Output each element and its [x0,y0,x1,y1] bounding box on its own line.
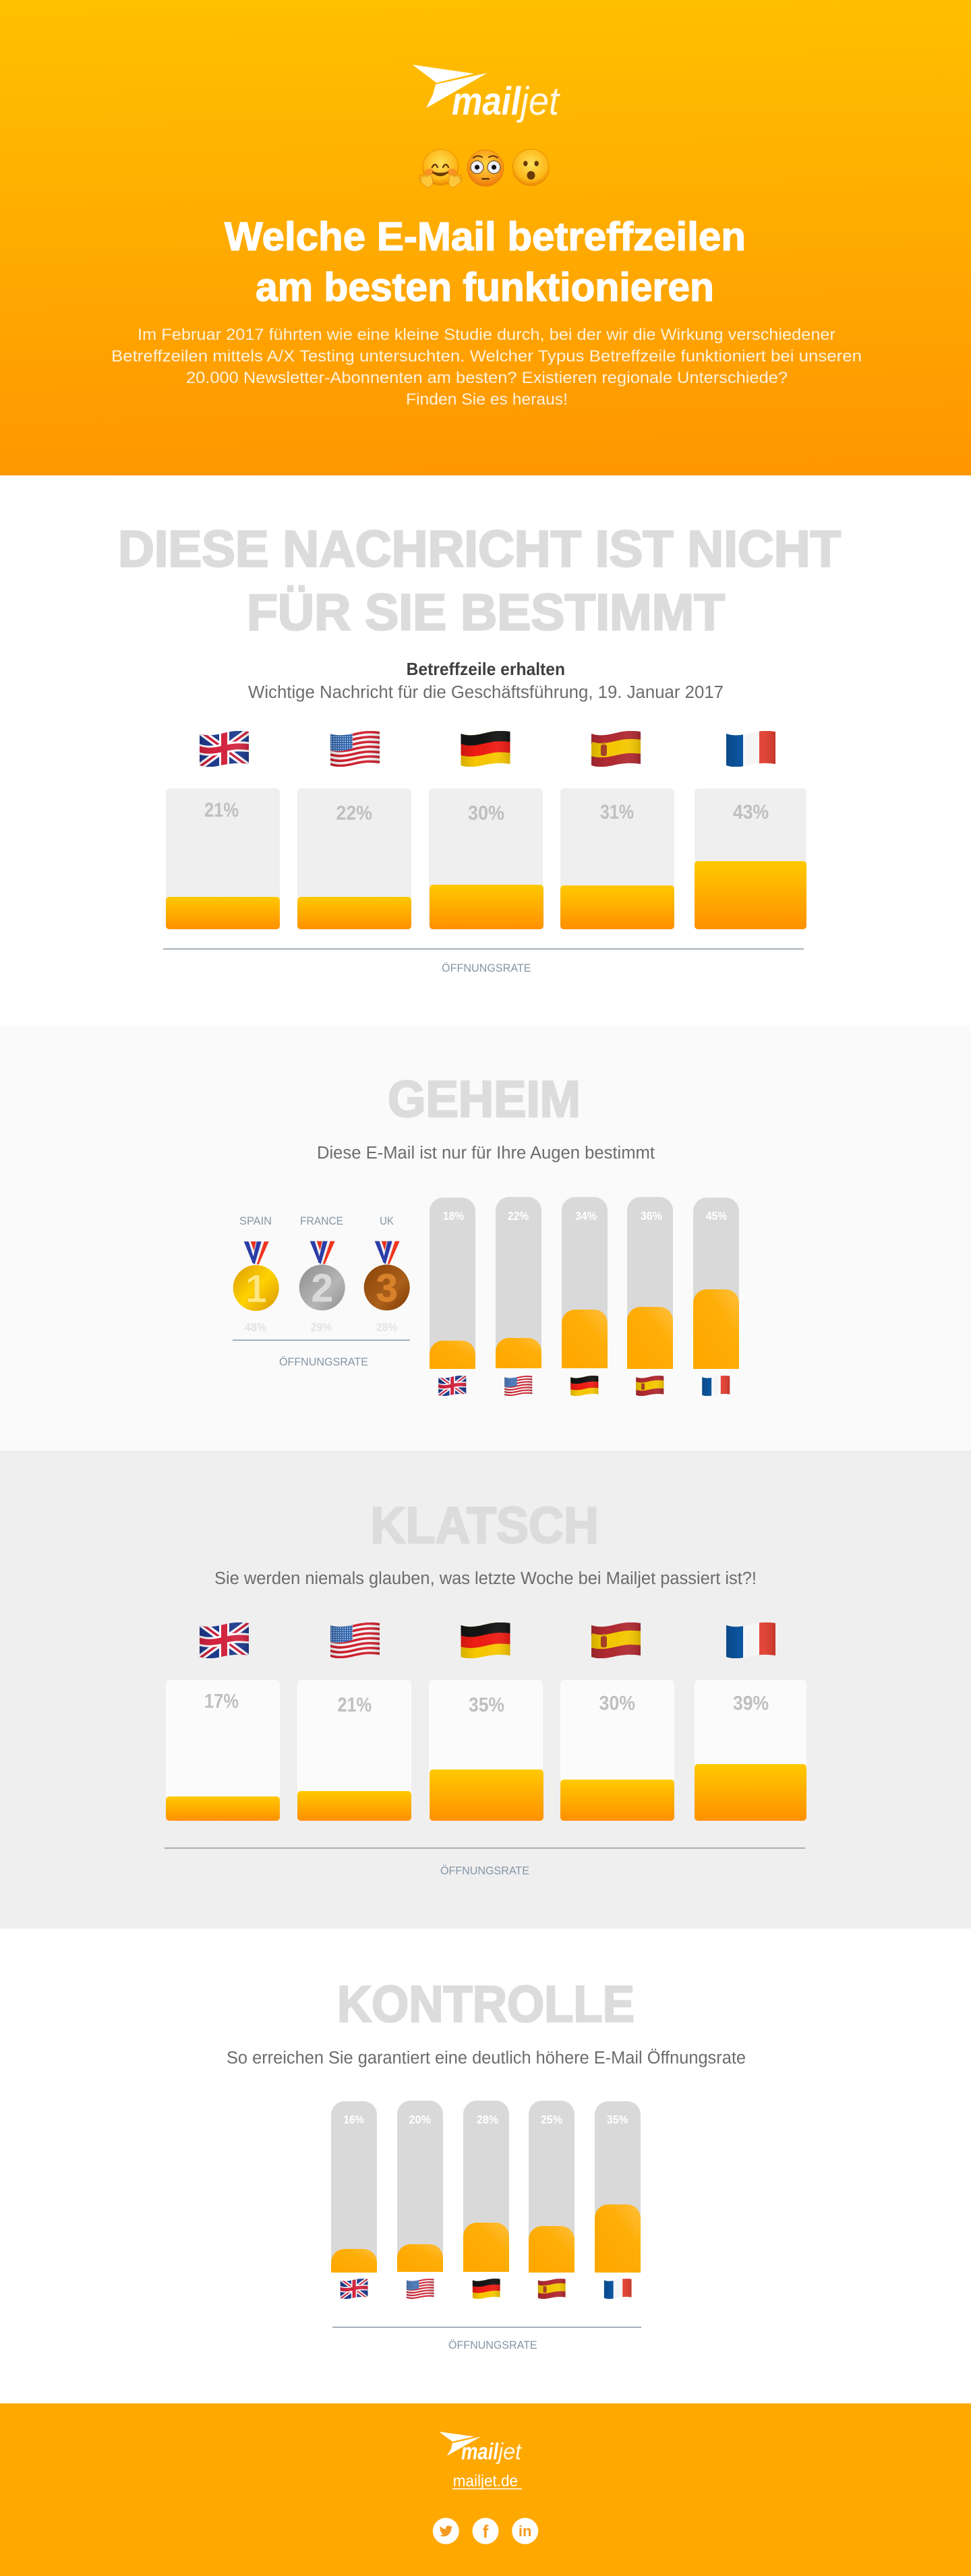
bar: France 39%: 39% [733,1693,769,1714]
bar: UK 17% [166,1680,280,1821]
icon: silver medal: 2 [312,1266,333,1310]
heading: Diese Nachricht [118,521,841,641]
text block: Kontrolle subject: So erreichen Sie garantiert eine deutlich höhere E-Mail Öffnungsrate [227,2049,746,2068]
bar: France 35% [595,2101,641,2273]
flag: UK [339,2279,369,2299]
heading: Diese Nachricht: DIESE NACHRICHT IST NICHT [118,521,841,578]
bar: Germany 28% [463,2101,509,2272]
flag: Spain [590,731,642,767]
panel: Kontrolle [0,1929,971,2403]
bar: France 39% [695,1680,806,1821]
value: France 29%: 29% [311,1320,332,1334]
flag: Germany [460,1622,511,1659]
flag: USA [329,731,381,767]
flag: France [604,2279,632,2299]
flag: UK [198,1622,250,1659]
flag: USA [329,1622,381,1659]
text block: Geheim subject: Diese E-Mail ist nur für Ihre Augen bestimmt [317,1144,655,1163]
bar: USA 22% [496,1197,541,1368]
icon: silver medal [299,1241,345,1310]
text block: introduction: 20.000 Newsletter-Abonnenten am besten? Existieren regionale Unterschiede? [186,369,788,387]
country label: France: FRANCE [300,1215,343,1227]
panel: Diese Nachricht ist nicht für Sie bestimmt [0,475,971,1026]
bar: Spain 30%: 30% [599,1693,635,1714]
logo: mailjet: jet [496,2439,522,2465]
bar: France 45% [693,1198,739,1369]
country label: Spain: SPAIN [239,1215,272,1227]
logo: mailjet: mail [461,2439,499,2465]
medal ranking [233,1215,410,1368]
text block: introduction: Finden Sie es heraus! [406,390,568,409]
bar: USA 22% [297,788,411,929]
text block: introduction [111,326,862,409]
icon: flushed face emoji [467,150,504,186]
flag: Germany [570,1376,599,1397]
bar: France 45%: 45% [706,1209,727,1223]
axis label: ÖFFNUNGSRATE [448,2339,537,2351]
value: Spain 48%: 48% [245,1320,266,1334]
bar: USA 22%: 22% [336,802,372,825]
bar: UK 18% [430,1198,475,1369]
bar: USA 21% [297,1680,411,1821]
bar: Spain 25% [529,2101,575,2273]
text block: subject line received: Betreffzeile erhalten [407,659,565,679]
flag: France [726,731,775,767]
icon: linkedin [512,2518,538,2544]
bar: UK 16%: 16% [344,2113,364,2126]
bar: France 43% [695,788,806,929]
icon: facebook [472,2518,499,2544]
title: Welche E-Mail betreffzeilen [225,214,746,259]
panel: footer [0,2403,971,2576]
icon: facebook: f [483,2521,489,2542]
bar: Germany 30%: 30% [468,802,504,825]
bar: Germany 35% [429,1680,543,1821]
flag: USA [504,1376,533,1397]
panel: Klatsch [0,1451,971,1929]
text block: subject line received [248,659,724,702]
icon: bronze medal [364,1241,410,1310]
logo: mailjet [413,65,561,123]
bar: UK 21%: 21% [204,799,239,821]
value: UK 28%: 28% [376,1320,397,1334]
flag: UK [198,731,250,767]
logo: mailjet: jet [516,80,561,123]
bar: France 43%: 43% [733,801,769,823]
bar: Spain 25%: 25% [541,2113,562,2126]
bar: UK 21% [166,788,280,929]
bar: Spain 30% [560,1680,674,1821]
bar: France 35%: 35% [607,2113,628,2126]
icon: linkedin: in [519,2523,531,2540]
text block: introduction: Im Februar 2017 führten wie eine kleine Studie durch, bei der wir die Wirkung verschiedener [138,326,835,344]
bar: USA 22%: 22% [508,1209,529,1223]
bar: Germany 30% [429,788,543,929]
country label: UK: UK [380,1215,394,1227]
flag: France [726,1622,775,1659]
flag: Germany [472,2279,501,2299]
icon: hushed face emoji [512,149,549,185]
logo: mailjet [439,2432,522,2465]
axis label: ÖFFNUNGSRATE [440,1865,529,1877]
icon: gold medal: 1 [245,1267,267,1311]
heading: Geheim: GEHEIM [388,1071,581,1128]
title: am besten funktionieren [256,265,714,310]
heading: Klatsch: KLATSCH [371,1497,599,1554]
heading: Diese Nachricht: FÜR SIE BESTIMMT [247,584,725,641]
icon: twitter [433,2518,459,2544]
bar: Spain 31% [560,788,674,929]
bar: Spain 31%: 31% [600,801,634,823]
flag: UK [438,1376,467,1397]
heading: Kontrolle: KONTROLLE [337,1976,635,2033]
bar: Germany 28%: 28% [477,2113,498,2126]
flag: France [702,1376,730,1397]
icon: hugging face emoji [419,150,463,187]
axis label: ÖFFNUNGSRATE [442,962,531,974]
axis label: ÖFFNUNGSRATE [279,1356,368,1368]
flag: Spain [537,2279,566,2299]
bar: UK 16% [331,2101,377,2273]
bar: USA 21%: 21% [337,1694,372,1716]
flag: Spain [590,1622,642,1659]
bar: Germany 35%: 35% [469,1694,504,1716]
icon: bronze medal: 3 [376,1266,398,1310]
bar: USA 20% [397,2101,443,2272]
text block: introduction: Betreffzeilen mittels A/X Testing untersuchten. Welcher Typus Betreffzeile funktioniert bei unseren [111,347,862,365]
bar: USA 20%: 20% [409,2113,431,2126]
text block: subject line received: Wichtige Nachricht für die Geschäftsführung, 19. Januar 2017 [248,683,724,702]
bar: Spain 36% [627,1197,673,1369]
title [225,214,746,310]
bar: Germany 34% [562,1197,608,1368]
text block: Klatsch subject: Sie werden niemals glauben, was letzte Woche bei Mailjet passiert ist?! [214,1569,757,1588]
link: mailjet.de: mailjet.de [453,2472,518,2490]
flag: USA [406,2279,435,2299]
flag: Germany [460,731,511,767]
logo: mailjet: mail [452,80,522,123]
bar: Spain 36%: 36% [641,1209,662,1223]
panel: hero header [0,0,971,475]
bar: UK 17%: 17% [204,1691,239,1713]
flag: Spain [635,1376,665,1397]
bar: Germany 34%: 34% [575,1209,597,1223]
icon: gold medal [233,1241,279,1311]
panel: Geheim [0,1026,971,1451]
bar: UK 18%: 18% [443,1209,464,1223]
